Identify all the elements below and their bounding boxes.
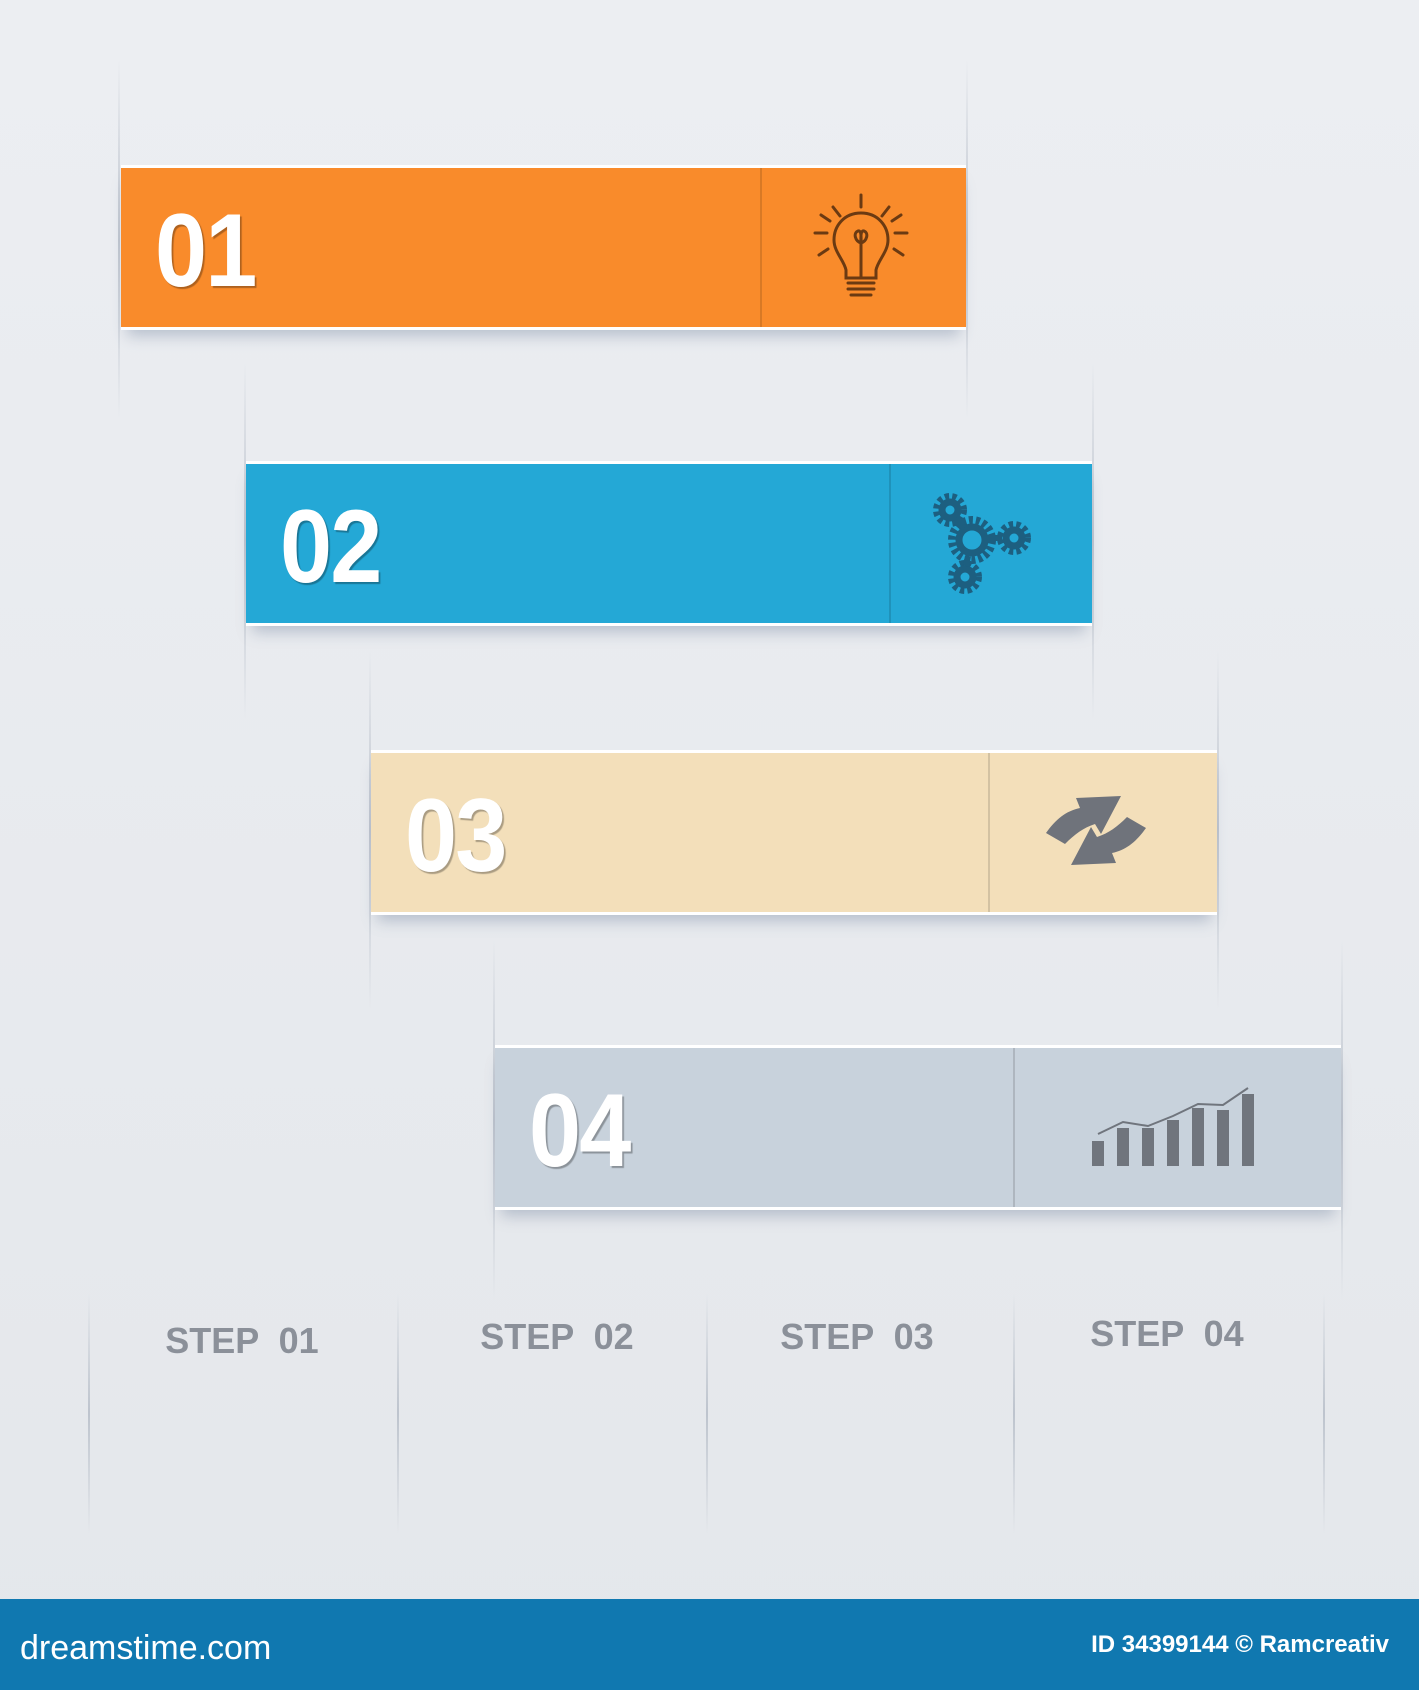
icon: bar chart bbox=[1092, 1087, 1254, 1166]
step 03 label: STEP 03 bbox=[780, 1316, 934, 1357]
step 04 label: STEP 04 bbox=[1090, 1313, 1244, 1354]
icon: exchange arrows bbox=[1046, 796, 1146, 865]
icon: light bulb bbox=[814, 194, 908, 296]
footer bbox=[0, 1599, 1419, 1690]
number 04: 04 bbox=[529, 1073, 630, 1189]
icon: gears bbox=[933, 493, 1031, 594]
bar 03 bbox=[371, 750, 1217, 915]
step 02 label: STEP 02 bbox=[480, 1316, 634, 1357]
footer credit: ID 34399144 © Ramcreativ bbox=[1091, 1631, 1389, 1658]
number 03: 03 bbox=[405, 778, 506, 894]
number 01: 01 bbox=[155, 193, 256, 309]
footer logo: dreamstime.com bbox=[20, 1629, 271, 1667]
step 01 label: STEP 01 bbox=[165, 1320, 319, 1361]
bar 02 bbox=[246, 461, 1092, 626]
bar 01 bbox=[121, 165, 966, 330]
number 02: 02 bbox=[280, 489, 381, 605]
bar 04 bbox=[495, 1045, 1341, 1210]
